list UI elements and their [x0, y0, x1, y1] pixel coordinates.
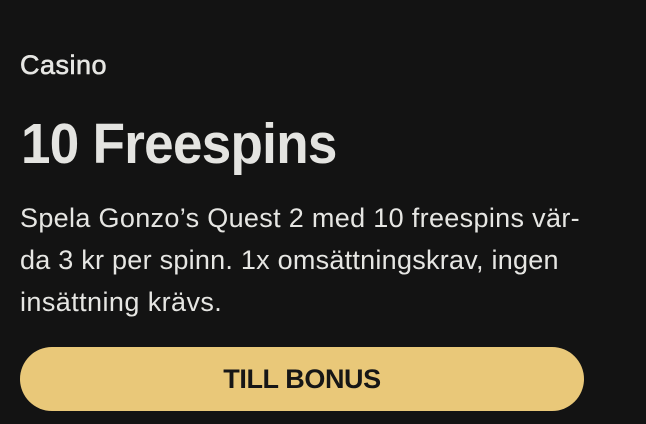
description line 2: da 3 kr per spinn. 1x omsättningskrav, ingen: [20, 245, 559, 275]
description text: [20, 203, 580, 317]
category label: Casino: [20, 50, 107, 80]
button: till bonus: TILL BONUS: [223, 364, 381, 394]
description line 3: insättning krävs.: [20, 287, 222, 317]
button: till bonus: [20, 347, 584, 411]
description line 1: Spela Gonzo’s Quest 2 med 10 freespins vär-: [20, 203, 580, 233]
heading: 10 Freespins: [21, 113, 337, 176]
